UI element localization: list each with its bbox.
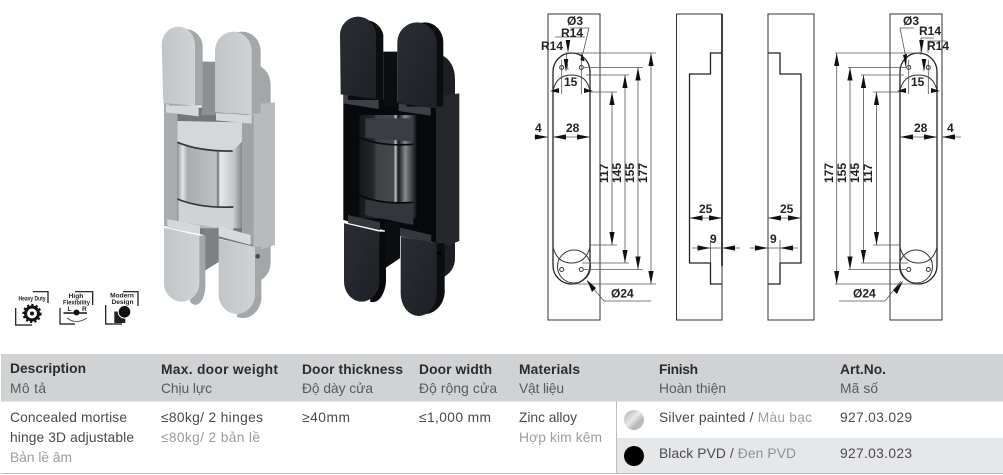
column: door thickness — [302, 362, 403, 425]
black finish row background — [617, 438, 1003, 473]
feature icon: High Flexibility: R — [82, 306, 87, 313]
column: max door weight: Max. door weight — [161, 362, 278, 377]
technical drawing: front view right: 15 — [911, 75, 925, 89]
feature icon: High Flexibility: L — [68, 306, 72, 313]
column: materials: Zinc alloy — [519, 410, 577, 425]
column: description: Bản lề âm — [10, 450, 72, 465]
feature icon: Modern Design — [106, 292, 138, 324]
table header band — [1, 354, 1003, 402]
column: materials — [519, 362, 602, 445]
feature icon: Heavy Duty — [16, 292, 48, 325]
column: finish: Black PVD / Đen PVD — [659, 446, 796, 461]
column: materials: Vật liệu — [519, 381, 564, 396]
column: materials: Hợp kim kêm — [519, 430, 602, 445]
feature icon: High Flexibility: High — [69, 293, 83, 300]
technical drawing: side view right: 9 — [770, 232, 777, 246]
hinge photo: black — [340, 17, 459, 316]
technical drawing: front view left: 177 — [636, 163, 650, 183]
technical drawing: front view right: Ø3 — [903, 14, 919, 28]
column: materials: Materials — [519, 362, 580, 377]
technical drawing: front view right: R14 — [919, 24, 941, 38]
column: finish: Hoàn thiện — [659, 381, 726, 396]
technical drawing: side view left: 9 — [710, 232, 717, 246]
column: article number: Mã số — [840, 381, 878, 396]
technical drawing: front view left: 145 — [610, 163, 624, 183]
technical drawing: front view right: Ø24 — [853, 286, 876, 300]
column: description: Concealed mortise — [10, 410, 127, 425]
technical drawing: side view right — [750, 14, 814, 320]
column: finish — [624, 362, 812, 466]
feature icon: Heavy Duty: Heavy Duty — [18, 296, 46, 303]
column: article number — [840, 362, 912, 461]
column: description — [10, 361, 134, 465]
column: door thickness: Độ dày cửa — [302, 381, 373, 396]
technical drawing: front view right: 117 — [861, 163, 875, 183]
feature icon: High Flexibility — [60, 292, 93, 324]
technical drawing: front view left: 4 — [535, 121, 542, 135]
technical drawing: front view right: 4 — [947, 121, 954, 135]
technical drawing: front view left: R14 — [561, 26, 583, 40]
swatch: black — [624, 446, 644, 466]
feature icon: Modern Design: Modern — [110, 292, 134, 300]
technical drawing: side view right: 25 — [780, 202, 794, 216]
technical drawing: front view left: R14 — [541, 39, 563, 53]
technical drawing: front view left: 117 — [597, 163, 611, 183]
hinge photo: silver — [162, 27, 275, 318]
technical drawing: front view left: Ø24 — [611, 286, 634, 300]
column: description: hinge 3D adjustable — [10, 430, 134, 445]
column: door width — [419, 362, 497, 425]
technical drawing: front view right: 28 — [914, 121, 928, 135]
column: finish: Finish — [659, 362, 698, 377]
column: door width: Door width — [419, 362, 492, 377]
column: max door weight: ≤80kg/ 2 hinges — [161, 410, 263, 425]
column: door width: Độ rộng cửa — [419, 381, 497, 396]
technical drawing: front view left: 28 — [566, 121, 580, 135]
technical drawing: front view left: Ø3 — [567, 14, 583, 28]
technical drawing: side view left: 25 — [699, 202, 713, 216]
column: door width: ≤1,000 mm — [419, 410, 491, 425]
technical drawing: front view left: 15 — [564, 75, 578, 89]
technical drawing: side view left — [676, 14, 740, 320]
technical drawing: front view right: 177 — [822, 163, 836, 183]
column: max door weight — [161, 362, 278, 445]
feature icon: High Flexibility: Flexibility — [63, 300, 90, 306]
swatch: silver — [624, 410, 644, 430]
column: article number: 927.03.029 — [840, 410, 912, 425]
technical drawing: front view right: 145 — [848, 163, 862, 183]
column: description: Mô tả — [10, 381, 46, 396]
technical drawing: front view left: 155 — [623, 163, 637, 183]
column: article number: 927.03.023 — [840, 446, 912, 461]
technical drawing: front view right: R14 — [927, 39, 949, 53]
column: finish: Silver painted / Màu bạc — [659, 410, 812, 425]
column: door thickness: ≥40mm — [302, 410, 350, 425]
column: description: Description — [10, 361, 86, 376]
column: door thickness: Door thickness — [302, 362, 403, 377]
column: max door weight: ≤80kg/ 2 bản lề — [161, 430, 260, 445]
technical drawing: front view right: 155 — [835, 163, 849, 183]
technical drawing: front view left — [534, 14, 656, 320]
feature icon: Modern Design: Design — [112, 299, 133, 306]
column: max door weight: Chịu lực — [161, 381, 212, 396]
technical drawing: front view right — [822, 14, 961, 320]
column: article number: Art.No. — [840, 362, 886, 377]
